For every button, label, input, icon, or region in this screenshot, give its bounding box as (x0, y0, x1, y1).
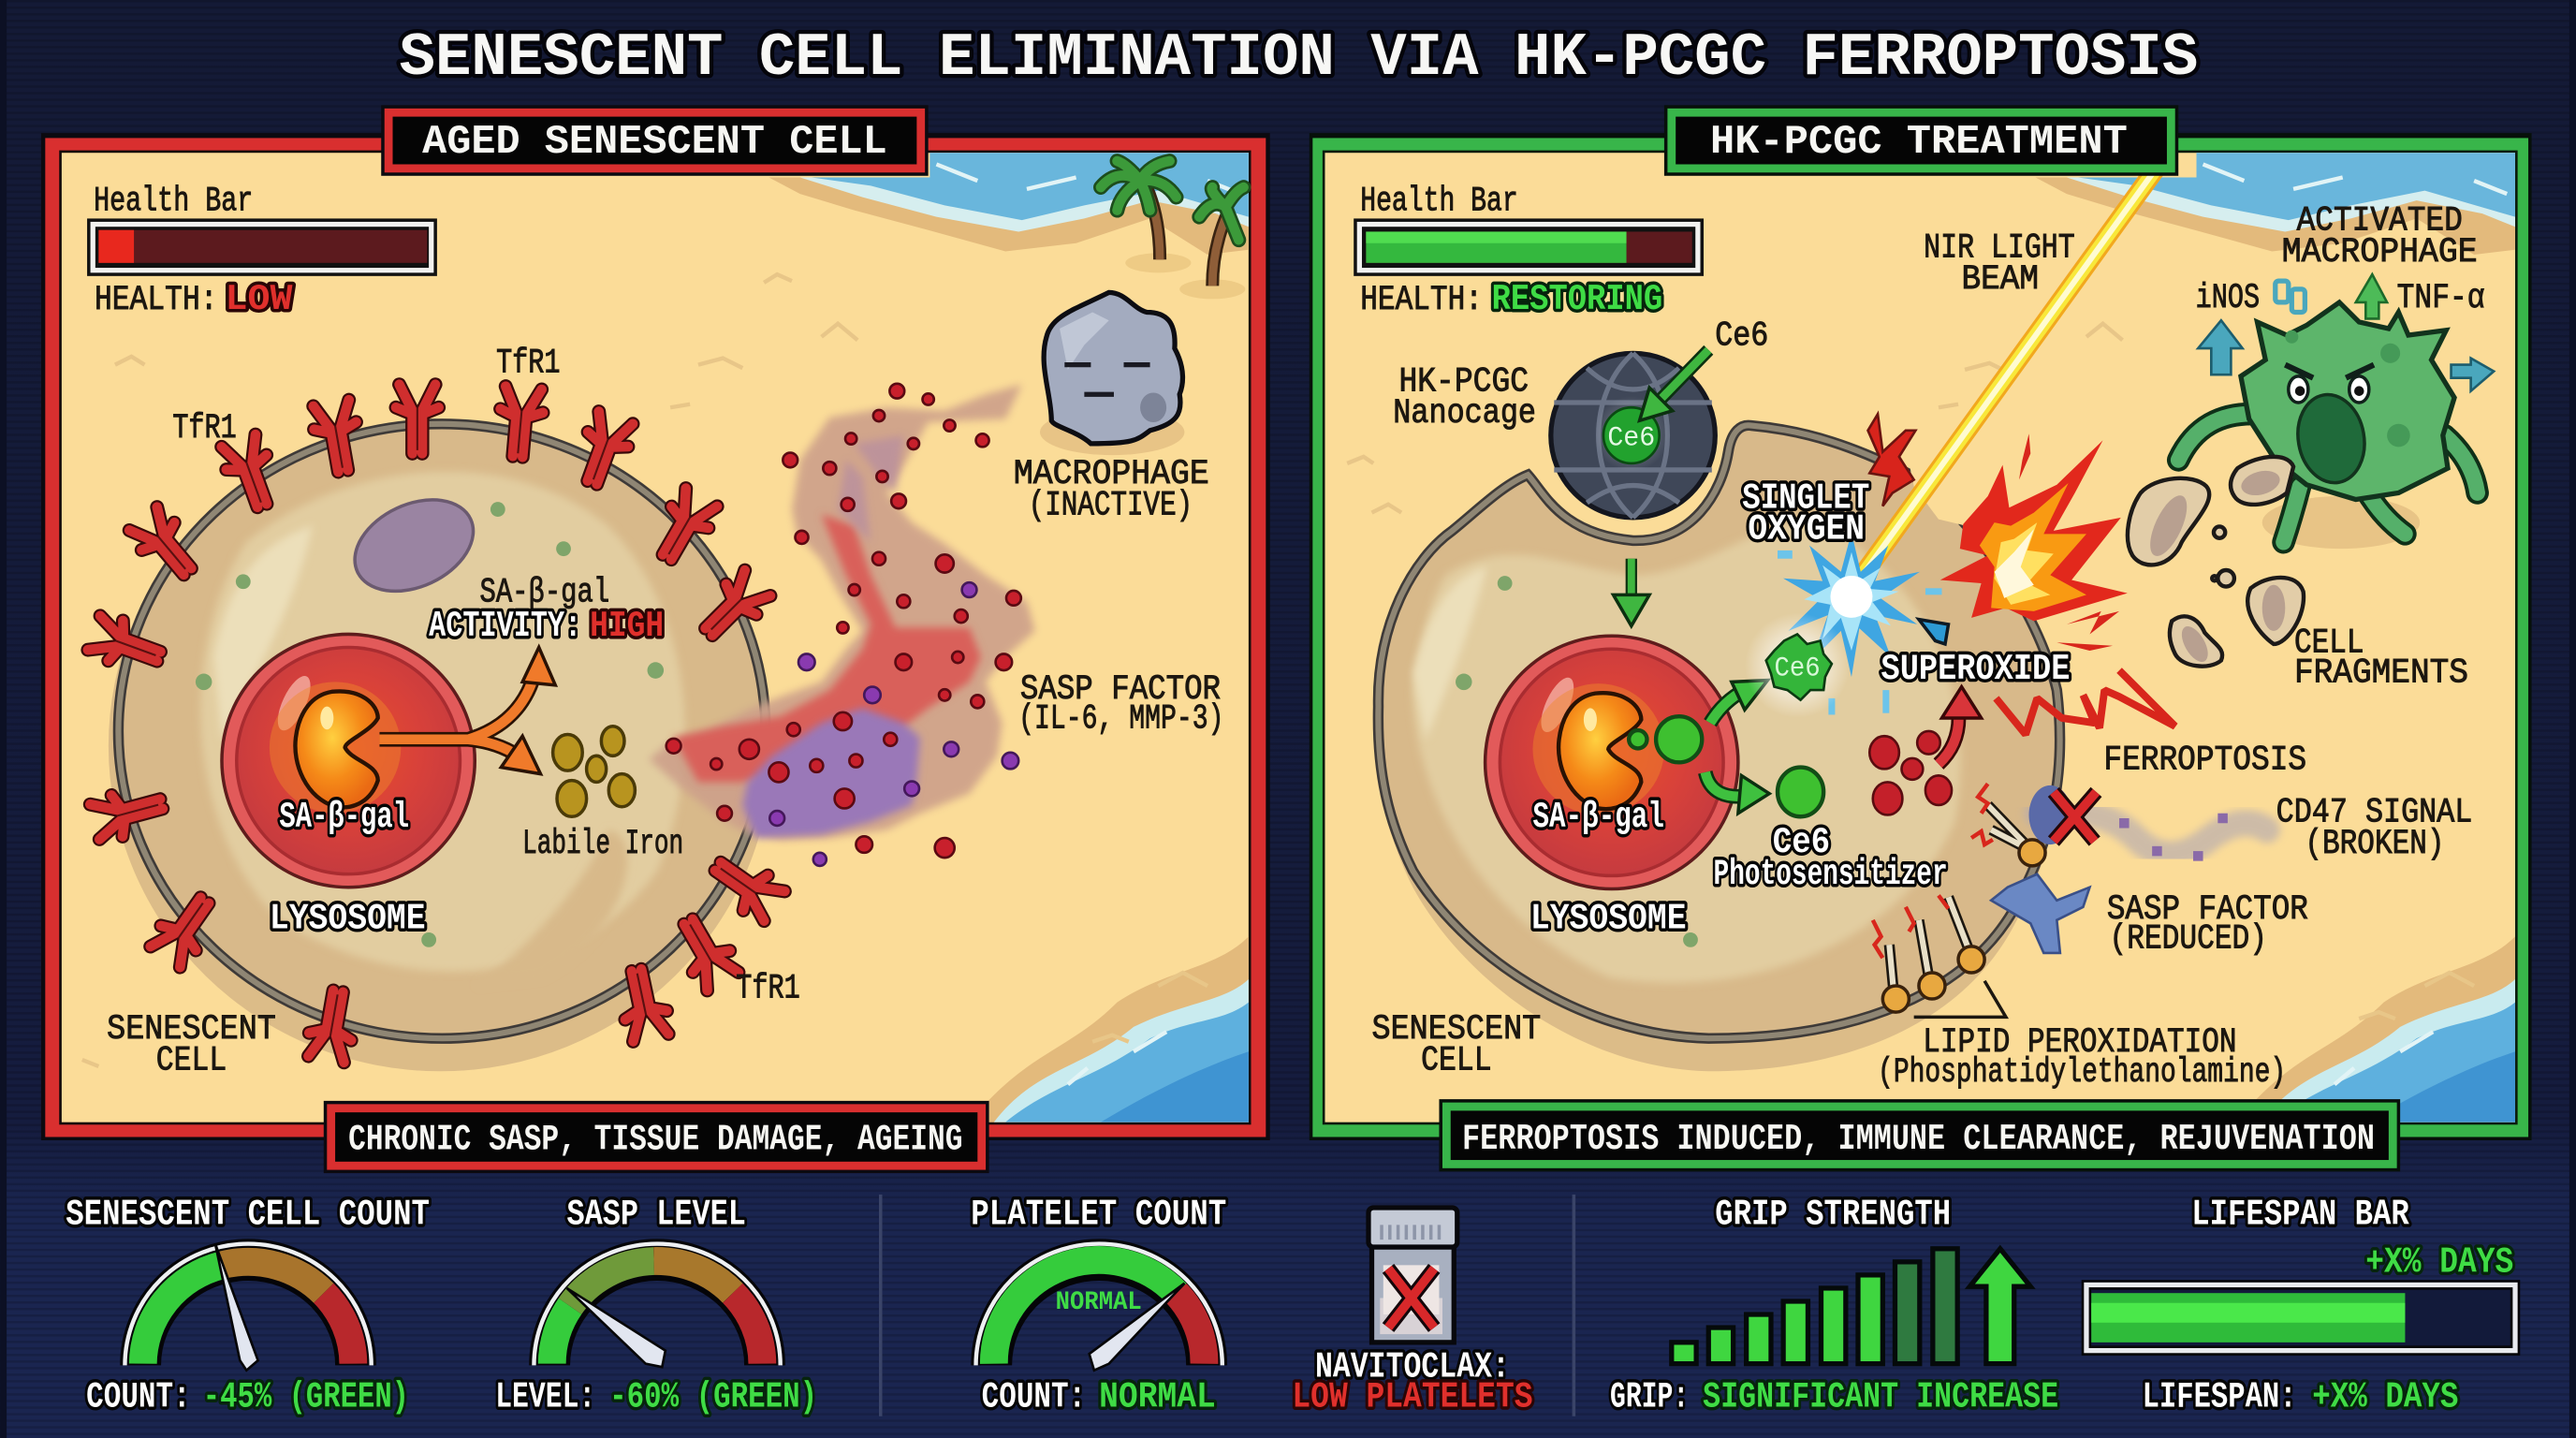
cytoplasm (1412, 523, 1961, 983)
treated cell (1378, 425, 2073, 1071)
labels: right panel: FRAGMENTS (2294, 653, 2468, 693)
red sparks (2019, 433, 2119, 651)
gauge (976, 1244, 1222, 1365)
labels: right panel: SINGLET (1742, 477, 1869, 519)
arrow: SA-beta-gal branching (379, 647, 555, 774)
HK-PCGC nanocage: Ce6 (1607, 422, 1655, 454)
body (2241, 302, 2454, 500)
lysosome (1484, 634, 1740, 890)
caption: ferroptosis induced (1439, 1099, 2400, 1171)
NIR light beam (1853, 151, 2169, 588)
caption: ferroptosis induced: FERROPTOSIS INDUCED, IMMUNE CLEARANCE, REJUVENATION (1462, 1119, 2375, 1160)
title: SENESCENT CELL ELIMINATION VIA HK-PCGC FERROPTOSIS (400, 24, 2198, 93)
health bar: Health Bar (94, 183, 253, 222)
labels: left panel: (IL-6, MMP-3) (1018, 699, 1224, 739)
labels: left panel: TfR1 (172, 409, 237, 448)
iron particles (1869, 731, 1952, 814)
torn membrane gap (1902, 431, 2073, 566)
inactive macrophage (1040, 292, 1184, 455)
cytoplasm (200, 472, 685, 972)
lysosome (220, 633, 476, 888)
labels: right panel: CD47 SIGNAL (2276, 794, 2472, 833)
cell halo (109, 420, 772, 1071)
labels: right panel: FERROPTOSIS (2103, 741, 2306, 780)
metric: SASP level (495, 1194, 817, 1417)
health bar (87, 183, 437, 320)
labels: right panel: Nanocage (1393, 394, 1536, 433)
beach sea bottom (970, 936, 1249, 1123)
metric: navitoclax: NAVITOCLAX: (1315, 1347, 1510, 1388)
needle (215, 1244, 258, 1371)
metric: SASP level: LEVEL: (495, 1376, 595, 1417)
arrow: Ce6 to cage (1640, 350, 1708, 420)
labels: right panel: CELL (1421, 1042, 1492, 1081)
labels: right panel: HK-PCGC (1398, 363, 1529, 403)
needle (1090, 1284, 1184, 1371)
labels: left panel: CELL (156, 1042, 227, 1081)
metric: grip strength: GRIP STRENGTH (1715, 1194, 1951, 1235)
nucleus (340, 482, 488, 609)
metric: SASP level: SASP LEVEL (567, 1194, 746, 1235)
metric: lifespan bar: LIFESPAN: (2143, 1376, 2297, 1417)
metric: SASP level: -60% (GREEN) (609, 1376, 817, 1417)
labels: right panel: SA-β-gal (1532, 797, 1664, 838)
labels: right panel: MACROPHAGE (2282, 233, 2478, 272)
labels: right panel: SASP FACTOR (2107, 890, 2308, 930)
labels: right panel: TNF-α (2397, 279, 2485, 318)
metric: platelet count: PLATELET COUNT (971, 1194, 1226, 1235)
labels: left panel: TfR1 (496, 345, 561, 384)
labels: right panel: LIPID PEROXIDATION (1923, 1023, 2237, 1063)
labels: left panel: ACTIVITY: (429, 606, 581, 647)
labels: right panel: (REDUCED) (2110, 920, 2267, 960)
cell halo (1378, 442, 2060, 1071)
labels: right panel: CELL (2294, 624, 2364, 664)
beach sea top (2036, 153, 2515, 255)
metric: grip strength (1610, 1194, 2058, 1417)
panel frame (41, 133, 1270, 1140)
labels: left panel: (INACTIVE) (1029, 486, 1193, 525)
metric: navitoclax (1292, 1208, 1532, 1417)
metric: senescent cell count: COUNT: (86, 1376, 191, 1417)
metric: platelet count: NORMAL (1099, 1376, 1216, 1417)
labels: right panel: SENESCENT (1372, 1010, 1541, 1049)
free Ce6 particles (1629, 716, 1823, 816)
SASP factor reduced (1991, 874, 2089, 953)
labels: right panel: (Phosphatidylethanolamine) (1878, 1053, 2286, 1093)
organelles (1456, 576, 1698, 947)
panel title: HK-PCGC treatment (1664, 105, 2178, 176)
health bar: HEALTH: (1360, 281, 1483, 320)
icon: crossed-out bottle (1368, 1208, 1457, 1343)
labels: right panel: ACTIVATED (2297, 202, 2463, 242)
Ce6 activated: Ce6 (1774, 652, 1821, 683)
labels: left panel: SA-β-gal (480, 573, 609, 612)
panel frame (1310, 133, 2532, 1140)
palm trees (1101, 161, 1245, 299)
health bar: RESTORING (1492, 279, 1662, 320)
arms and legs (2178, 414, 2478, 542)
cell fragments (2128, 457, 2304, 667)
gauge (124, 1244, 372, 1365)
eyes (2289, 376, 2308, 403)
labels: left panel: HIGH (590, 606, 664, 647)
panel title: aged senescent cell: AGED SENESCENT CELL (422, 119, 887, 166)
beach sea top (768, 153, 1249, 255)
metric: navitoclax: LOW PLATELETS (1292, 1376, 1532, 1417)
caption: chronic SASP (324, 1101, 989, 1173)
HK-PCGC nanocage (1551, 353, 1715, 518)
labels: left panel: TfR1 (736, 969, 800, 1008)
dividers (879, 1195, 1575, 1416)
metric: senescent cell count: SENESCENT CELL COUNT (66, 1194, 430, 1235)
caption: chronic SASP: CHRONIC SASP, TISSUE DAMAGE, AGEING (348, 1120, 963, 1161)
needle (567, 1288, 666, 1367)
cell body and membrane (118, 424, 766, 1038)
singlet oxygen starburst (1778, 533, 1949, 714)
SASP cloud (649, 384, 1035, 866)
arrow: to superoxide (1939, 687, 1982, 764)
CD47 signal broken (2029, 785, 2267, 861)
labels: right panel (1372, 202, 2485, 1093)
metric: platelet count: NORMAL (1056, 1288, 1142, 1317)
health bar: HEALTH: (95, 281, 218, 320)
labels: right panel: (BROKEN) (2305, 825, 2445, 864)
labels: right panel: Ce6 (1773, 822, 1830, 863)
senescent cell (87, 385, 786, 1071)
SASP particles (666, 384, 1021, 858)
panel title: HK-PCGC treatment: HK-PCGC TREATMENT (1710, 119, 2128, 166)
sand marks (1347, 324, 2474, 1019)
labels: left panel: LYSOSOME (270, 899, 426, 940)
metric: platelet count (971, 1194, 1226, 1417)
arrows: green release (1705, 681, 1769, 814)
cell body and membrane (1378, 425, 2060, 1038)
labels: left panel: SA-β-gal (279, 797, 409, 838)
arrows: iNOS and TNF (2198, 274, 2494, 391)
labels: right panel: LYSOSOME (1530, 899, 1687, 940)
labels: left panel (107, 345, 1224, 1081)
red burst on membrane (1868, 414, 1915, 506)
health bar: LOW (225, 279, 293, 320)
labels: right panel: OXYGEN (1748, 509, 1865, 550)
labels: right panel: Photosensitizer (1714, 854, 1948, 895)
health bar (1354, 183, 1704, 320)
health bar: Health Bar (1360, 183, 1518, 222)
metric: lifespan bar: +X% DAYS (2365, 1241, 2513, 1283)
superoxide explosion (1940, 433, 2175, 734)
metric: senescent cell count: -45% (GREEN) (203, 1376, 409, 1417)
Ce6 activated (1745, 613, 1850, 718)
gauge (534, 1244, 781, 1365)
sand marks (82, 274, 1208, 1066)
metric: lifespan bar: +X% DAYS (2312, 1376, 2458, 1417)
labels: right panel: BEAM (1962, 260, 2039, 300)
metric: lifespan bar (2082, 1194, 2520, 1417)
panel: HK-PCGC treatment (1310, 105, 2532, 1171)
metric: grip strength: GRIP: (1610, 1376, 1689, 1417)
labile iron (553, 726, 635, 816)
metric: grip strength: SIGNIFICANT INCREASE (1703, 1376, 2058, 1417)
labels: left panel: SASP FACTOR (1020, 670, 1221, 710)
panel title: aged senescent cell (381, 105, 929, 176)
panel: aged senescent cell (41, 105, 1270, 1173)
red lightning (1996, 670, 2175, 734)
beach sea bottom (2236, 936, 2515, 1123)
progress bar (2082, 1280, 2520, 1356)
metric: senescent cell count (66, 1194, 430, 1417)
arrow: cage down to lysosome (1613, 559, 1649, 626)
lipid peroxidation (1873, 784, 2045, 1017)
metric: lifespan bar: LIFESPAN BAR (2191, 1194, 2409, 1235)
labels: right panel: SUPEROXIDE (1881, 649, 2070, 690)
bar chart (1672, 1249, 1957, 1364)
receptors: TfR1 (87, 385, 786, 1063)
labels: left panel: SENESCENT (107, 1010, 276, 1049)
labels: right panel: Ce6 (1715, 317, 1768, 357)
labels: right panel: iNOS (2196, 279, 2260, 318)
arrow up (1969, 1249, 2030, 1364)
labels: left panel: MACROPHAGE (1014, 455, 1209, 494)
organelles (196, 502, 664, 947)
metric: platelet count: COUNT: (982, 1376, 1086, 1417)
labels: left panel: Labile Iron (522, 825, 683, 864)
activated macrophage (2178, 302, 2478, 549)
labels: right panel: NIR LIGHT (1924, 229, 2075, 269)
